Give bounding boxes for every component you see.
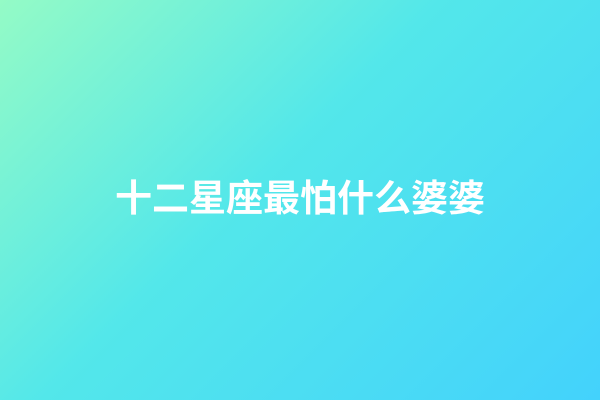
title: 十二星座最怕什么婆婆 bbox=[115, 178, 485, 219]
